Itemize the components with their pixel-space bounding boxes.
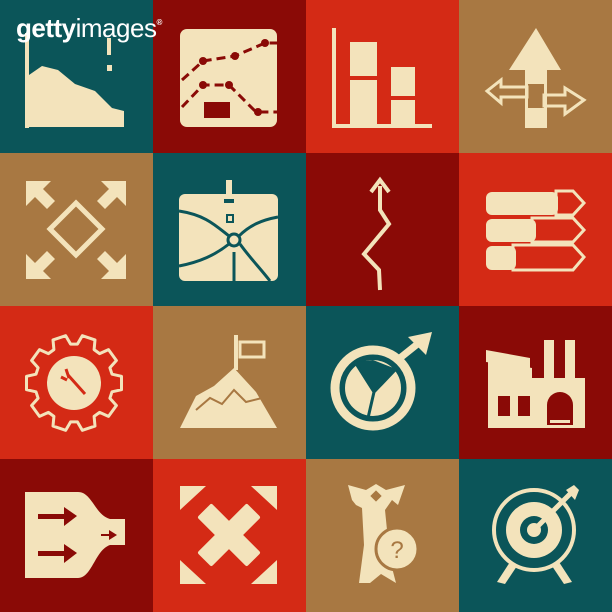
icon: map with roads <box>179 180 278 281</box>
icon: line chart board <box>180 29 277 127</box>
icon: road with question <box>348 484 418 583</box>
watermark text: ® <box>156 18 162 27</box>
icon: zigzag arrow <box>364 180 389 290</box>
icon: gear with wrench <box>26 336 122 430</box>
icon: direction arrows <box>487 28 584 128</box>
icon: expand diamond <box>26 181 126 279</box>
icon: cross with corner arrows <box>180 486 278 584</box>
icon: area chart with warning <box>25 33 124 128</box>
icon: road with question: ? <box>390 537 404 564</box>
icon: mountain with flag <box>180 335 277 428</box>
icon: bar chart <box>332 28 432 128</box>
icon: stacked arrow bars <box>486 191 584 270</box>
watermark text: gettyimages <box>16 13 156 43</box>
icon: factory <box>486 340 585 428</box>
icon: pie chart with arrow <box>335 332 432 426</box>
icon: funnel with arrows <box>25 492 125 578</box>
icon: target with arrow <box>494 485 579 584</box>
